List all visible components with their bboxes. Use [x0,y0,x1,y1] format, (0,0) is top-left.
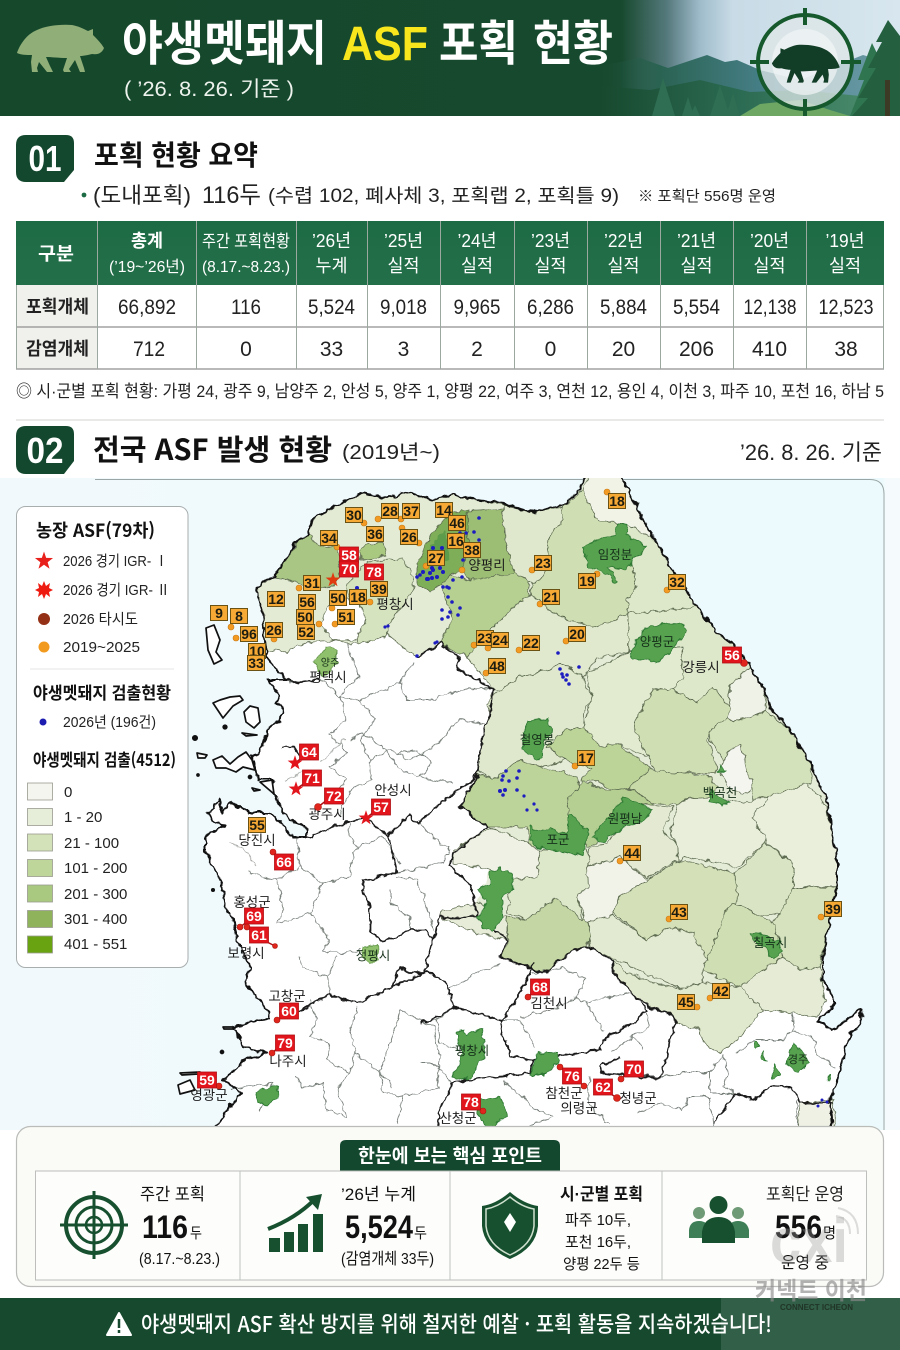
key points tab: 한눈에 보는 핵심 포인트 [358,1141,542,1168]
red farm markers 2026: 78 [463,1094,479,1110]
legend: detection scale: 21 - 100 [64,835,119,852]
table: capture statistics: 20 [612,338,635,361]
table: capture statistics: 3 [398,338,409,361]
red farm markers 2026: 78 [366,564,382,580]
orange farm markers 2019-2025: 18 [350,589,366,605]
table: capture statistics: 12,138 [744,296,796,319]
watermark: connect icheon: CONNECT ICHEON [780,1303,853,1312]
place names: 강릉시 [682,656,720,676]
badge 01 [16,135,74,182]
key point: by city [560,1185,643,1273]
legend: farm ASF [35,517,170,656]
place names: 광주시 [308,803,346,823]
place names: 의령군 [560,1097,598,1117]
key point: cumulative 2026 [341,1185,434,1268]
table: capture statistics: 9,018 [380,296,427,319]
heading: national ASF status: 전국 ASF 발생 현황 [93,427,332,469]
table: capture statistics: ’23년 [531,231,570,251]
icon: rising bars [268,1194,323,1252]
red farm markers 2026: 56 [724,647,740,663]
green patches: protected areas [255,523,831,1128]
watermark: connect icheon: 커넥트 이천 [755,1271,867,1306]
orange farm markers 2019-2025: 51 [338,609,354,625]
orange farm markers 2019-2025: 33 [248,655,264,671]
footer banner [0,1298,900,1350]
key point: capture team: 명 [823,1225,836,1242]
orange farm markers 2019-2025: 42 [713,983,729,999]
red farm markers 2026: 76 [564,1068,580,1084]
orange farm markers 2019-2025: 48 [489,658,505,674]
key point: weekly capture: 두 [190,1225,202,1242]
orange farm markers 2019-2025: 21 [543,589,559,605]
orange farm markers 2019-2025: 46 [449,515,465,531]
table: capture statistics: 구분 [38,244,74,264]
place names: 양평리 [468,554,506,574]
table: capture statistics: 감염개체 [26,339,89,359]
table: capture statistics: ’19년 [826,231,864,251]
islands [178,625,274,1094]
park names: 평창시 [455,1040,489,1059]
legend: detection scale: 201 - 300 [64,886,127,903]
place names: 나주시 [269,1050,307,1070]
orange farm markers 2019-2025: 27 [428,550,444,566]
orange farm markers 2019-2025: 96 [241,626,257,642]
badge 01: 01 [28,138,62,179]
table: capture statistics: 실적 [754,256,786,276]
place names: 안성시 [374,779,412,799]
title: 야생멧돼지 [122,4,327,74]
park names: 백곡천 [703,782,737,801]
orange farm markers 2019-2025: 18 [609,493,625,509]
icon: shield [482,1192,538,1259]
orange farm markers 2019-2025: 19 [579,573,595,589]
table: capture statistics: 2 [471,338,483,361]
red farm markers 2026: 58 [341,547,357,563]
red farm markers 2026: 79 [277,1035,293,1051]
key point: weekly capture: 116 [142,1209,188,1245]
orange farm markers 2019-2025: 34 [321,530,337,546]
legend: detection scale: 101 - 200 [64,860,127,877]
red farm markers 2026: 68 [532,979,548,995]
place names: 당진시 [238,829,276,849]
place names: 영광군 [190,1084,228,1104]
heading: national ASF status: (2019년~) [342,441,440,464]
table: capture statistics: 실적 [534,256,566,276]
park names: 경주 [788,1051,808,1067]
orange farm markers 2019-2025: 23 [477,630,493,646]
badge 02 [16,426,74,474]
key point: by city: 포천 16두, [565,1234,631,1251]
orange farm markers 2019-2025: 36 [367,526,383,542]
watermark: connect icheon: cxi [770,1207,848,1276]
red farm markers 2026: 64 [301,744,317,760]
county boundary lines [230,643,837,1125]
provincial boundary lines [277,643,833,1130]
land mass [206,634,860,1126]
red farm markers 2026: 62 [595,1079,611,1095]
footer banner: 야생멧돼지 ASF 확산 방지를 위해 철저한 예찰 · 포획 활동을 지속하겠습니다! [141,1307,772,1339]
key point: by city: 파주 10두, [565,1212,631,1229]
key point: weekly capture: (8.17.~8.23.) [139,1251,220,1268]
orange farm markers 2019-2025: 24 [492,632,508,648]
red farm markers 2026: 72 [326,788,342,804]
subtitle date: ( ’26. 8. 26. 기준 ) [124,78,294,101]
icon: conifer trees [850,20,900,116]
orange farm markers 2019-2025: 39 [825,901,841,917]
summary line [82,182,776,209]
panel: map legend [16,506,188,968]
park names: 양주 [321,654,339,669]
table: capture statistics: 주간 포획현황 [202,232,290,251]
red farm markers 2026: 69 [246,908,262,924]
table: capture statistics: 실적 [461,256,493,276]
legend: detection scale: 401 - 551 [64,936,127,953]
table: capture statistics: 실적 [680,256,712,276]
table: capture statistics: 116 [231,296,261,319]
table: capture statistics: (’19~’26년) [109,258,185,276]
orange farm markers 2019-2025: 50 [297,609,313,625]
table: capture statistics: 66,892 [118,296,176,319]
key point: capture team [766,1185,844,1272]
key point: cumulative 2026: ’26년 누계 [341,1185,416,1204]
orange farm markers 2019-2025: 16 [448,533,464,549]
table: capture statistics: 실적 [388,256,420,276]
legend: detection scale: 301 - 400 [64,911,127,928]
summary line: 116두 [202,182,261,209]
orange farm markers 2019-2025: 55 [249,817,265,833]
legend: detection scale: 1 - 20 [64,809,102,826]
orange farm markers 2019-2025: 14 [436,502,452,518]
red farm markers 2026: 66 [276,854,292,870]
red farm markers 2026: 59 [199,1072,215,1088]
place names: 산청군 [439,1107,477,1127]
key point: weekly capture: 주간 포획 [140,1185,205,1204]
icon: scope with boar [750,8,861,116]
orange farm markers 2019-2025: 28 [382,503,398,519]
orange farm markers 2019-2025: 30 [346,507,362,523]
coastline [257,470,585,600]
legend: detections 2026: 2026년 (196건) [63,714,156,731]
orange farm markers 2019-2025: 17 [578,750,594,766]
panel: key points [16,1126,884,1286]
orange farm markers 2019-2025: 26 [401,529,417,545]
legend: farm ASF: 2026 경기 IGR- Ⅰ [63,553,168,570]
table: capture statistics: 5,884 [600,296,647,319]
orange farm markers 2019-2025 [210,489,842,1010]
orange farm markers 2019-2025: 38 [464,542,480,558]
header banner [0,0,900,116]
orange farm markers 2019-2025: 56 [299,594,315,610]
heading: national ASF status: ’26. 8. 26. 기준 [740,440,882,465]
legend: detection scale [28,746,176,953]
table: capture statistics: 6,286 [527,296,574,319]
orange farm markers 2019-2025: 8 [235,608,243,624]
key point: by city: 양평 22두 등 [563,1256,640,1273]
title [124,20,612,65]
park names: 포군 [546,829,570,848]
park names [321,544,808,1067]
table: capture statistics: ’22년 [604,231,643,251]
colored county regions [257,470,837,1130]
table: capture statistics: 5,524 [308,296,355,319]
table: capture statistics: (8.17.~8.23.) [202,259,290,276]
red farm markers 2026: 71 [304,770,320,786]
icon: target [60,1191,128,1259]
table: capture statistics: 실적 [829,256,861,276]
legend: detection scale: 야생멧돼지 검출(4512) [33,746,176,771]
legend: farm ASF: 농장 ASF(79차) [36,517,155,543]
orange farm markers 2019-2025: 52 [298,624,314,640]
title: 현황 [533,4,613,74]
red farm markers 2026: 57 [373,799,389,815]
title: 포획 [439,4,518,74]
table: capture statistics: 410 [752,338,787,361]
park names: 원평남 [608,808,643,827]
orange farm markers 2019-2025: 22 [523,635,539,651]
table: capture statistics: ’20년 [750,231,789,251]
orange farm markers 2019-2025: 9 [215,605,223,621]
icon: warning triangle [107,1313,131,1335]
key point: capture team: 포획단 운영 [766,1185,844,1204]
key point: cumulative 2026: 두 [414,1225,427,1242]
key point: capture team: 556 [775,1209,822,1245]
table: capture statistics: 0 [240,338,252,361]
summary line: (수렵 102, 폐사체 3, 포획랩 2, 포획틀 9) [268,185,619,207]
table: capture statistics [16,221,884,369]
badge 02: 02 [26,430,64,471]
table: capture statistics: 포획개체 [26,297,89,317]
orange farm markers 2019-2025: 43 [671,904,687,920]
table: capture statistics: 206 [679,338,714,361]
park names: 칠곡시 [753,932,787,951]
summary line: ※ 포획단 556명 운영 [638,188,776,205]
key point: cumulative 2026: 5,524 [345,1209,413,1245]
watermark: connect icheon [755,1207,867,1312]
legend: farm ASF: 2026 타시도 [63,611,138,628]
park names: 임정분 [598,544,632,563]
red farm markers 2026: 70 [341,561,357,577]
table: capture statistics: 누계 [316,256,348,276]
base tint of the high-detection zone [459,478,836,1014]
orange farm markers 2019-2025: 37 [403,503,419,519]
key point: weekly capture [139,1185,220,1268]
orange farm markers 2019-2025: 45 [678,994,694,1010]
orange farm markers 2019-2025: 10 [249,643,265,659]
icon: people [689,1196,749,1243]
key point: by city: 시·군별 포획 [560,1185,643,1204]
title: ASF [342,18,428,71]
icon: boar silhouette [17,25,104,72]
park names: 정평시 [356,945,390,964]
table: capture statistics: 712 [133,338,165,361]
orange farm markers 2019-2025: 39 [371,581,387,597]
orange farm markers 2019-2025: 23 [535,555,551,571]
orange farm markers 2019-2025: 32 [669,574,685,590]
red farm markers 2026: 61 [251,927,267,943]
heading: national ASF status [93,427,882,469]
table: capture statistics: 38 [834,338,858,361]
orange farm markers 2019-2025: 31 [304,575,320,591]
orange farm markers 2019-2025: 26 [266,622,282,638]
table: capture statistics: 12,523 [818,296,874,319]
red farm markers 2026 [198,547,748,1114]
orange farm markers 2019-2025: 50 [330,590,346,606]
legend: detections 2026 [33,679,171,731]
legend: detections 2026: 야생멧돼지 검출현황 [33,679,171,704]
key point: capture team: 운영 중 [781,1254,829,1272]
table: capture statistics: 9,965 [454,296,500,319]
table: capture statistics: ’26년 [312,231,351,251]
place names: 청녕군 [619,1087,657,1107]
park names: 양평군 [640,631,674,650]
place names: 평택시 [309,666,347,686]
legend: farm ASF: 2026 경기 IGR- Ⅱ [63,582,170,599]
place names: 김천시 [530,992,568,1012]
table: capture statistics: 실적 [608,256,640,276]
orange farm markers 2019-2025: 20 [569,626,585,642]
panel: map background [0,478,900,1130]
table: capture statistics: 33 [320,338,343,361]
table: capture statistics: ’25년 [384,231,423,251]
place names: 참천군 [545,1082,583,1102]
place names: 고창군 [268,985,306,1005]
key point: cumulative 2026: (감염개체 33두) [341,1250,434,1268]
place names: 평창시 [376,593,414,613]
legend: farm ASF: 2019~2025 [63,639,140,656]
table: capture statistics: ’24년 [458,231,496,251]
red farm markers 2026: 70 [626,1061,642,1077]
table: capture statistics: 0 [545,338,556,361]
red farm markers 2026: 60 [281,1003,297,1019]
table: capture statistics: 5,554 [673,296,720,319]
place names: 보령시 [227,942,265,962]
orange farm markers 2019-2025: 12 [268,591,284,607]
park names: 철영봉 [520,729,554,748]
summary line: (도내포획) [93,183,191,208]
table: capture statistics: ’21년 [677,231,716,251]
wild boar detections 2026 [351,516,828,1108]
map of South Korea [178,470,862,1140]
heading: capture summary: 포획 현황 요약 [94,134,258,174]
place names: 홍성군 [233,891,271,911]
legend: detection scale: 0 [64,784,72,801]
orange farm markers 2019-2025: 44 [624,845,640,861]
place names [190,554,720,1127]
table: capture statistics: 총계 [131,231,163,251]
